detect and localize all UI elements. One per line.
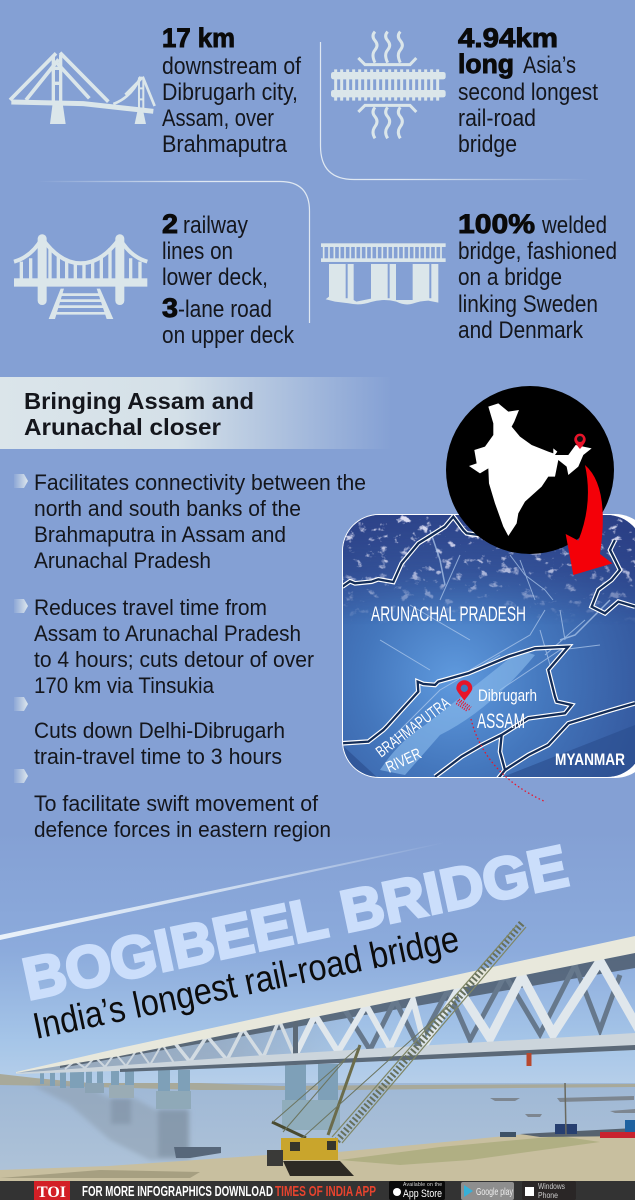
reflections [32,1085,190,1160]
heading band [0,377,392,449]
stat: 4.94 km: Asia’s [523,52,576,79]
Windows Phone badge [522,1181,576,1200]
far truss members [345,965,620,1050]
stat: 2 railway lines: on upper deck [162,322,295,349]
truss shadow [60,950,635,1068]
text: 4.94 km: 4.94km [458,23,558,53]
text: 100% welded: 100% [458,209,535,239]
stat: 2 railway lines: 3 [162,293,178,323]
lower deck [16,1033,635,1074]
locator pin [574,434,586,449]
stat: 2 railway lines: lines on [162,238,233,265]
India locator circle [446,386,614,554]
icon: bridge on piers [321,243,446,304]
far shore [0,1074,635,1090]
stat: 4.94 km: long [458,49,514,79]
stat: 4.94 km: bridge [458,131,517,158]
rivers [380,530,610,740]
Google Play badge [461,1182,514,1200]
map labels: RIVER [384,746,424,777]
bullet 1: Arunachal Pradesh [34,548,211,573]
Windows Phone badge: Windows [538,1182,565,1191]
top chord [16,936,635,1073]
stat: 2 railway lines: -lane road [178,296,272,323]
heading text: Arunachal closer [24,414,221,440]
stat: 2 railway lines [14,209,295,349]
stat: 100% welded: on a bridge [458,264,562,291]
Google Play badge: Google play [476,1187,513,1198]
stat: 17 km: Assam, over [162,105,274,132]
footer bar [0,1181,635,1200]
bullet 2: Reduces travel time from [34,595,267,620]
TOI logo [34,1181,70,1200]
bullet 1: Facilitates connectivity between the [34,470,366,495]
stat: 100% welded [321,209,617,344]
stat: 2 railway lines: lower deck, [162,264,268,291]
state borders [342,517,635,778]
stat: 2 railway lines: railway [183,212,248,239]
App Store badge: App Store [403,1188,442,1200]
valley [380,650,535,775]
App Store badge [389,1181,445,1200]
dotted route [471,719,546,802]
sky gradient [0,830,635,1100]
map panel [342,514,635,802]
icon: rail track over water [331,32,446,138]
App Store badge: Available on the [403,1182,442,1188]
text: 2 railway lines: 2 [162,209,178,239]
text: 17 km: 17 km [162,23,235,53]
bullet 1 [14,470,366,573]
truss infill [16,1024,326,1073]
bullet 2: to 4 hours; cuts detour of over [34,647,314,672]
bullet 4 [14,769,331,842]
bullet 4: defence forces in eastern region [34,817,331,842]
map labels: BRAHMAPUTRA [373,695,454,761]
icon: suspension bridge [10,53,155,124]
stat: 4.94 km [331,23,598,158]
icon: bridge with rail deck [14,234,147,319]
stat: 4.94 km: rail-road [458,105,536,132]
location pin: Dibrugarh [456,680,472,711]
footer text: FOR MORE INFOGRAPHICS DOWNLOAD [82,1183,273,1200]
bullet 3 [14,697,285,769]
map labels: Dibrugarh [478,686,537,705]
river [0,1083,635,1170]
map labels: ASSAM [477,710,525,733]
heading text [24,388,254,440]
stat: 100% welded: and Denmark [458,317,584,344]
bullet 4: To facilitate swift movement of [34,791,319,816]
bullet 1: Brahmaputra in Assam and [34,522,286,547]
truss diagonals [65,961,635,1069]
India map [469,403,592,536]
bullet 2 [14,595,314,698]
stat: 17 km [10,23,301,158]
stat: 17 km: downstream of [162,53,301,80]
red arrow [566,465,612,575]
heading text: Bringing Assam and [24,388,254,414]
map labels [371,603,625,777]
crane [267,923,566,1176]
photo: Bogibeel bridge [0,923,635,1183]
title: BOGIBEEL BRIDGE: BOGIBEEL BRIDGE [17,833,574,1013]
footer app name: TIMES OF INDIA APP [275,1183,376,1200]
piers [40,1064,340,1130]
bullet 3: train-travel time to 3 hours [34,744,282,769]
sandbank [0,1134,635,1181]
subtitle: India’s longest rail-road bridge [29,918,462,1047]
Windows Phone badge: Phone [538,1191,558,1200]
stat: 100% welded: welded [541,212,607,239]
diagonal accent line [0,842,445,940]
stat: 4.94 km: second longest [458,79,598,106]
bullet 3: Cuts down Delhi-Dibrugarh [34,718,285,743]
divider: left stat frame [37,182,310,323]
stat: 100% welded: linking Sweden [458,291,598,318]
bullet 2: 170 km via Tinsukia [34,673,214,698]
stat: 17 km: Brahmaputra [162,131,288,158]
bullet 1: north and south banks of the [34,496,301,521]
divider: right stat frame [320,42,590,180]
map labels: ARUNACHAL PRADESH [371,603,526,626]
stat: 17 km: Dibrugarh city, [162,79,298,106]
bullet 2: Assam to Arunachal Pradesh [34,621,301,646]
